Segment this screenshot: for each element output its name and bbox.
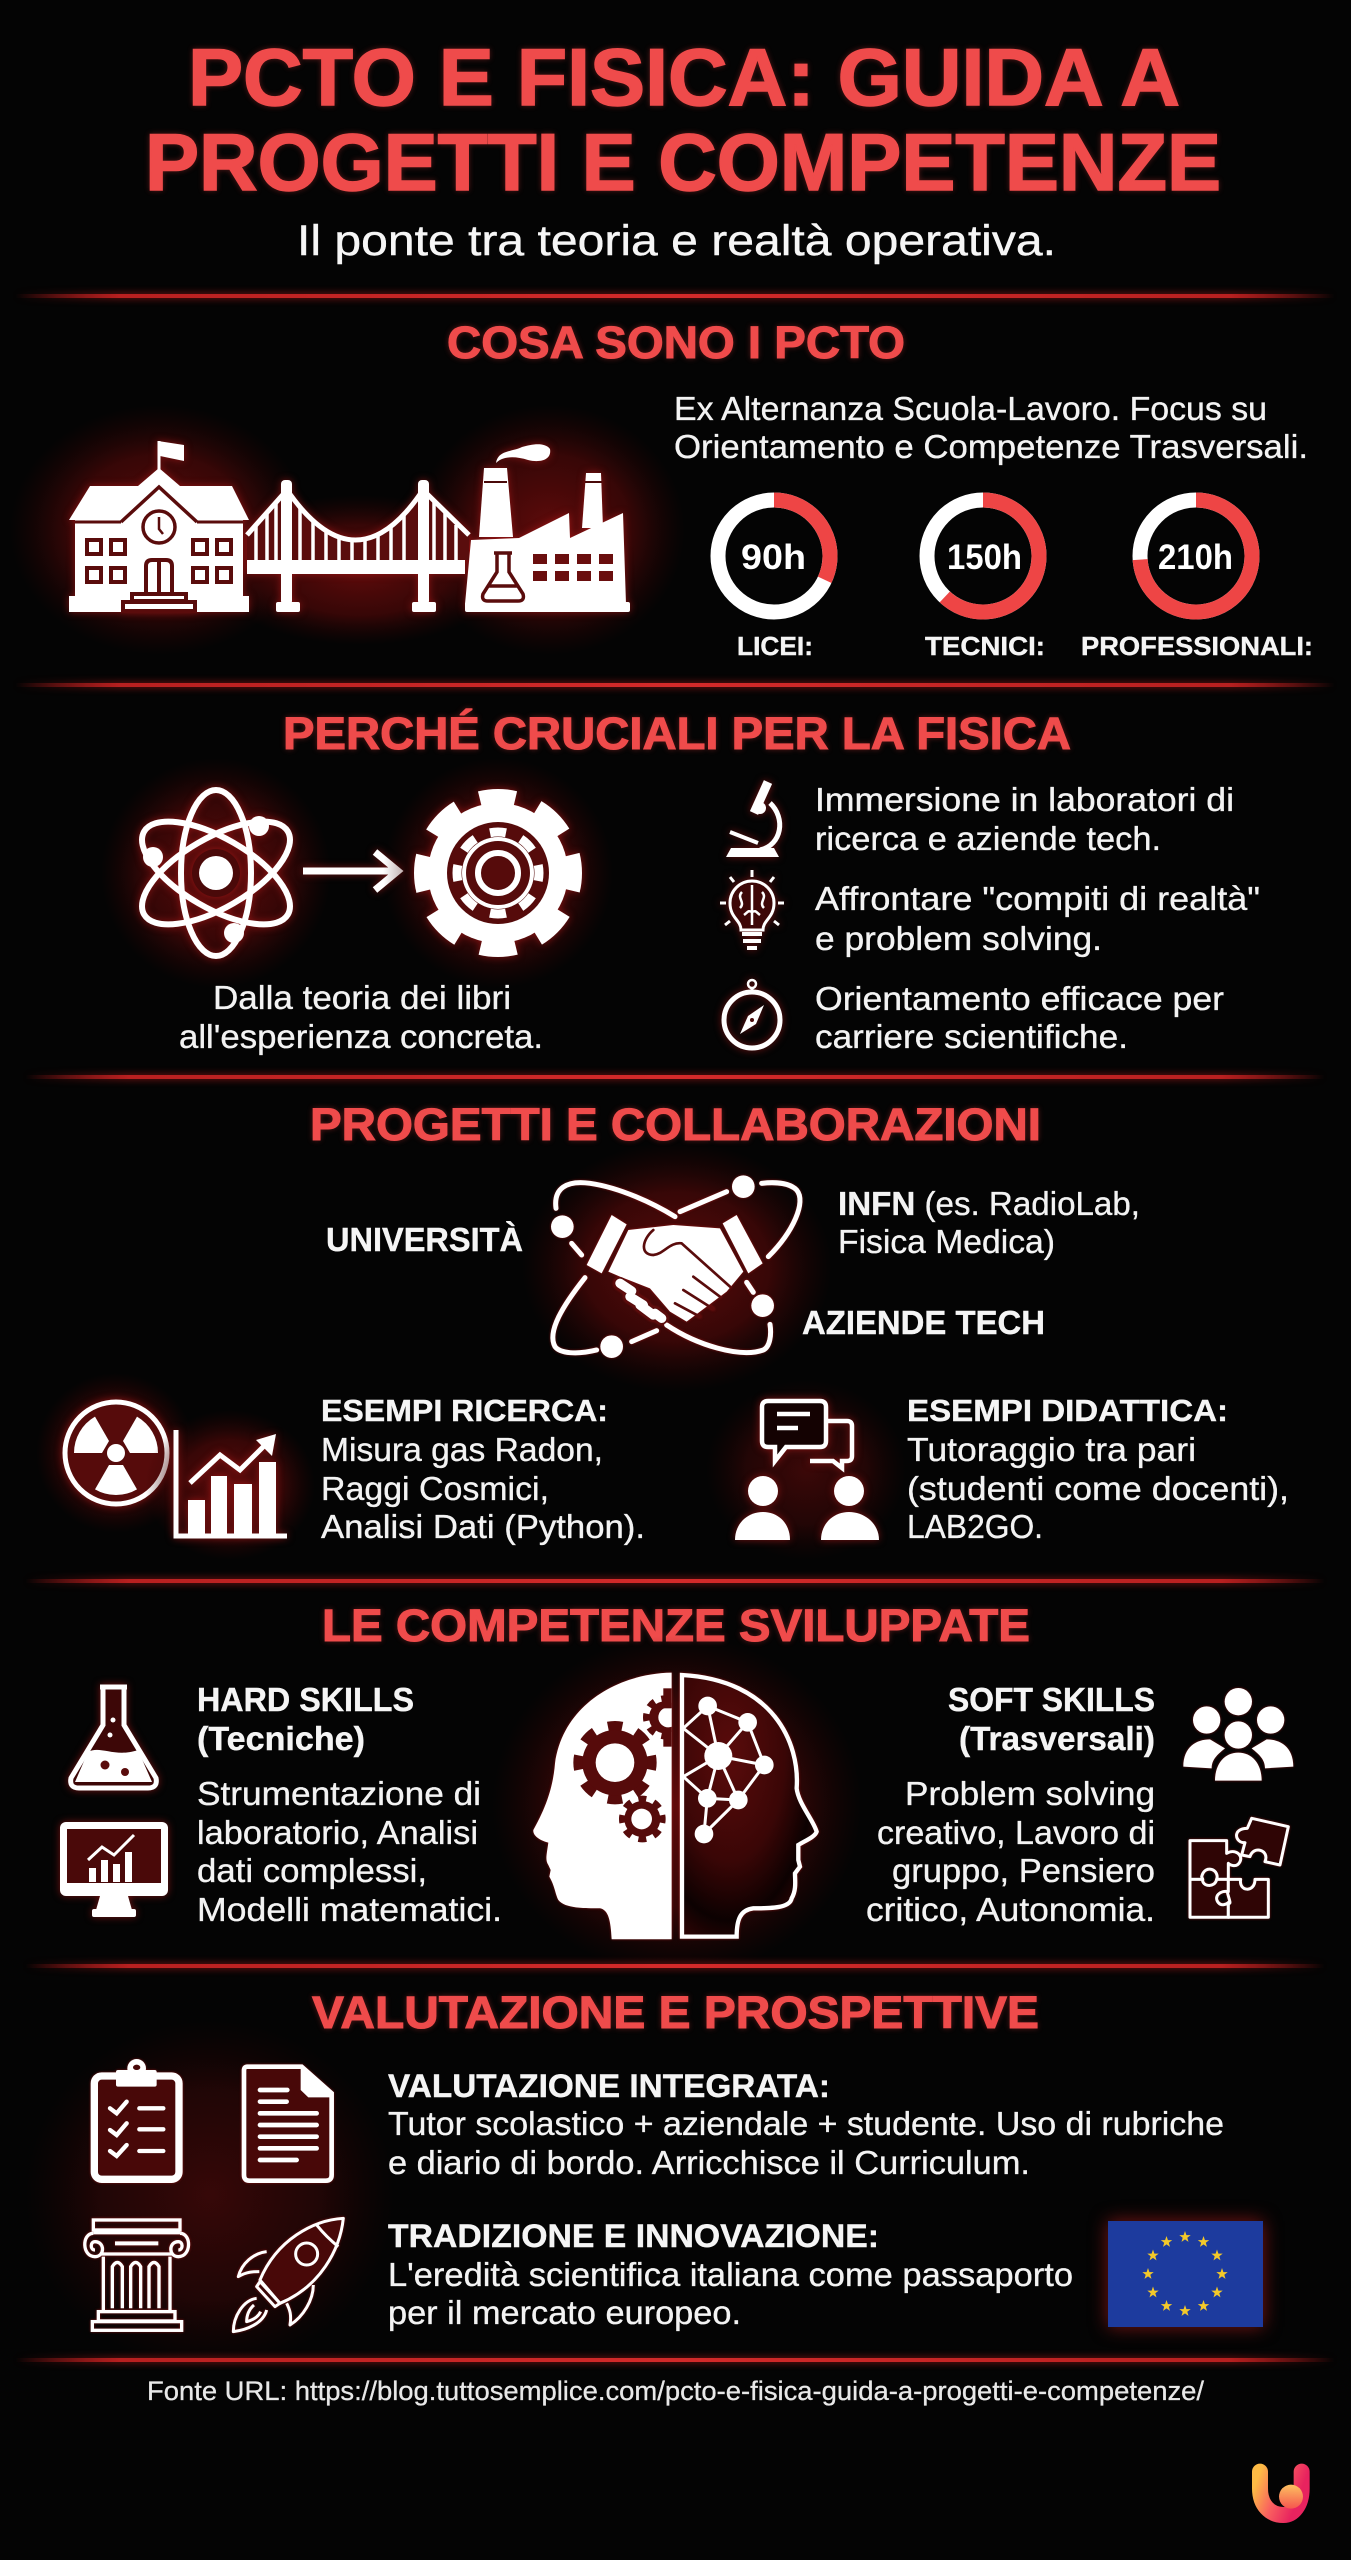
icon: chat bubbles and peers	[706, 1380, 906, 1560]
donut: licei 90h: 90h	[741, 538, 806, 577]
icon: puzzle	[1190, 1818, 1288, 1917]
icon: column	[85, 2220, 189, 2330]
description: Orientamento e Competenze Trasversali.	[674, 428, 1308, 465]
text: hard skills: (Tecniche)	[197, 1720, 365, 1757]
text: soft skills: gruppo, Pensiero	[892, 1852, 1155, 1889]
icon: compass	[724, 980, 780, 1048]
text: esempi didattica: (studenti come docenti),	[907, 1470, 1289, 1507]
icon: factory	[465, 444, 630, 612]
icon: monitor chart	[60, 1822, 168, 1917]
text: hard skills: HARD SKILLS	[197, 1681, 414, 1718]
donut: licei 90h: LICEI:	[737, 631, 813, 661]
icon: rising chart	[145, 1410, 315, 1560]
label: INFN	[838, 1185, 1140, 1260]
icon: document	[244, 2067, 332, 2181]
logo	[1260, 2472, 1303, 2515]
text: esempi didattica: LAB2GO.	[907, 1508, 1043, 1545]
text: immersione	[815, 781, 1234, 857]
panel: perché cruciali	[101, 708, 1260, 1055]
icon: atom	[101, 758, 331, 988]
text: compiti di realtà: e problem solving.	[815, 920, 1102, 957]
arrow	[303, 852, 398, 890]
text: hard skills: dati complessi,	[197, 1852, 427, 1889]
text: hard skills: laboratorio, Analisi	[197, 1814, 478, 1851]
text: orientamento	[815, 980, 1224, 1055]
icon: school	[69, 441, 249, 612]
panel: valutazione e prospettive	[25, 1987, 1263, 2370]
icon: brain bulb	[720, 870, 784, 948]
text: esempi didattica	[907, 1393, 1289, 1545]
icon: EU flag	[1108, 2221, 1263, 2327]
text: hard skills	[197, 1681, 502, 1928]
text: soft skills: critico, Autonomia.	[866, 1891, 1155, 1928]
description: Ex Alternanza Scuola-Lavoro. Focus su	[674, 390, 1267, 427]
text: tradizione e innovazione: TRADIZIONE E INNOVAZIONE:	[388, 2218, 879, 2254]
panel: progetti e collaborazioni	[36, 1099, 1289, 1560]
text: soft skills: Problem solving	[905, 1775, 1155, 1812]
heading: VALUTAZIONE E PROSPETTIVE	[312, 1987, 1039, 2038]
text: soft skills: (Trasversali)	[959, 1720, 1155, 1757]
icon: rocket	[233, 2218, 343, 2332]
donut: tecnici 150h	[925, 500, 1045, 661]
text: orientamento: Orientamento efficace per	[815, 980, 1224, 1017]
text: compiti di realtà: Affrontare "compiti di realtà"	[815, 880, 1260, 917]
caption: Dalla teoria dei libri	[213, 979, 511, 1016]
text: orientamento: carriere scientifiche.	[815, 1018, 1128, 1055]
text: immersione: ricerca e aziende tech.	[815, 820, 1161, 857]
text: esempi ricerca: Misura gas Radon,	[321, 1431, 603, 1468]
panel: competenze	[60, 1600, 1293, 1975]
text: esempi didattica: Tutoraggio tra pari	[907, 1431, 1196, 1468]
text: tradizione e innovazione: per il mercato europeo.	[388, 2294, 741, 2331]
panel: cosa sono i PCTO	[10, 317, 1313, 661]
text: tradizione e innovazione: L'eredità scientifica italiana come passaporto	[388, 2256, 1073, 2293]
donut: licei 90h	[718, 500, 830, 661]
source line: Fonte URL: https://blog.tuttosemplice.com/pcto-e-fisica-guida-a-progetti-e-competenze/	[147, 2376, 1204, 2406]
heading: PERCHÉ CRUCIALI PER LA FISICA	[283, 708, 1071, 759]
text: hard skills: Strumentazione di	[197, 1775, 481, 1812]
text: esempi ricerca	[321, 1393, 645, 1545]
text: esempi ricerca: Analisi Dati (Python).	[321, 1508, 645, 1545]
text: esempi ricerca: Raggi Cosmici,	[321, 1470, 549, 1507]
title	[145, 33, 1221, 208]
donut: professionali 210h: 210h	[1158, 538, 1233, 577]
heading: COSA SONO I PCTO	[447, 317, 905, 368]
icon: bridge	[247, 480, 469, 612]
donut: professionali 210h: PROFESSIONALI:	[1081, 631, 1313, 661]
text: soft skills: SOFT SKILLS	[948, 1681, 1155, 1718]
icon: microscope	[726, 782, 780, 857]
heading: PROGETTI E COLLABORAZIONI	[310, 1099, 1041, 1150]
text: valutazione integrata: Tutor scolastico + aziendale + studente. Uso di rubriche	[388, 2105, 1224, 2142]
icon: radiation	[36, 1373, 196, 1533]
icon: clipboard	[94, 2059, 179, 2179]
text: soft skills	[866, 1681, 1155, 1928]
icons: evaluation and tradition	[25, 2020, 395, 2370]
icon: gear	[383, 758, 613, 988]
label: INFN: INFN (es. RadioLab,	[838, 1185, 1140, 1222]
description	[674, 390, 1308, 465]
icon: flask	[71, 1687, 156, 1788]
illustration: school, bridge, factory	[10, 405, 685, 655]
subtitle: Il ponte tra teoria e realtà operativa.	[297, 217, 1056, 265]
text: esempi ricerca: ESEMPI RICERCA:	[321, 1393, 608, 1428]
text: soft skills: creativo, Lavoro di	[877, 1814, 1155, 1851]
label: INFN: Fisica Medica)	[838, 1223, 1055, 1260]
title: PCTO E FISICA: GUIDA A	[188, 33, 1180, 123]
caption	[179, 979, 543, 1055]
donut: tecnici 150h: TECNICI:	[925, 631, 1045, 661]
heading: LE COMPETENZE SVILUPPATE	[322, 1600, 1030, 1651]
text: immersione: Immersione in laboratori di	[815, 781, 1234, 818]
text: compiti di realtà	[815, 880, 1260, 957]
icon: team	[1183, 1688, 1293, 1781]
donut: tecnici 150h: 150h	[947, 538, 1022, 577]
label: università: UNIVERSITÀ	[326, 1221, 523, 1258]
icon: split head	[509, 1639, 845, 1960]
caption: all'esperienza concreta.	[179, 1018, 543, 1055]
text: tradizione e innovazione	[388, 2218, 1073, 2331]
text: valutazione integrata	[388, 2068, 1224, 2181]
text: valutazione integrata: e diario di bordo. Arricchisce il Curriculum.	[388, 2144, 1030, 2181]
text: esempi didattica: ESEMPI DIDATTICA:	[907, 1393, 1228, 1428]
label: aziende tech: AZIENDE TECH	[802, 1304, 1045, 1341]
text: valutazione integrata: VALUTAZIONE INTEGRATA:	[388, 2068, 830, 2104]
title: PROGETTI E COMPETENZE	[145, 118, 1221, 208]
text: hard skills: Modelli matematici.	[197, 1891, 502, 1928]
donut: professionali 210h	[1081, 500, 1313, 661]
icon: handshake in orbits	[522, 1142, 832, 1392]
